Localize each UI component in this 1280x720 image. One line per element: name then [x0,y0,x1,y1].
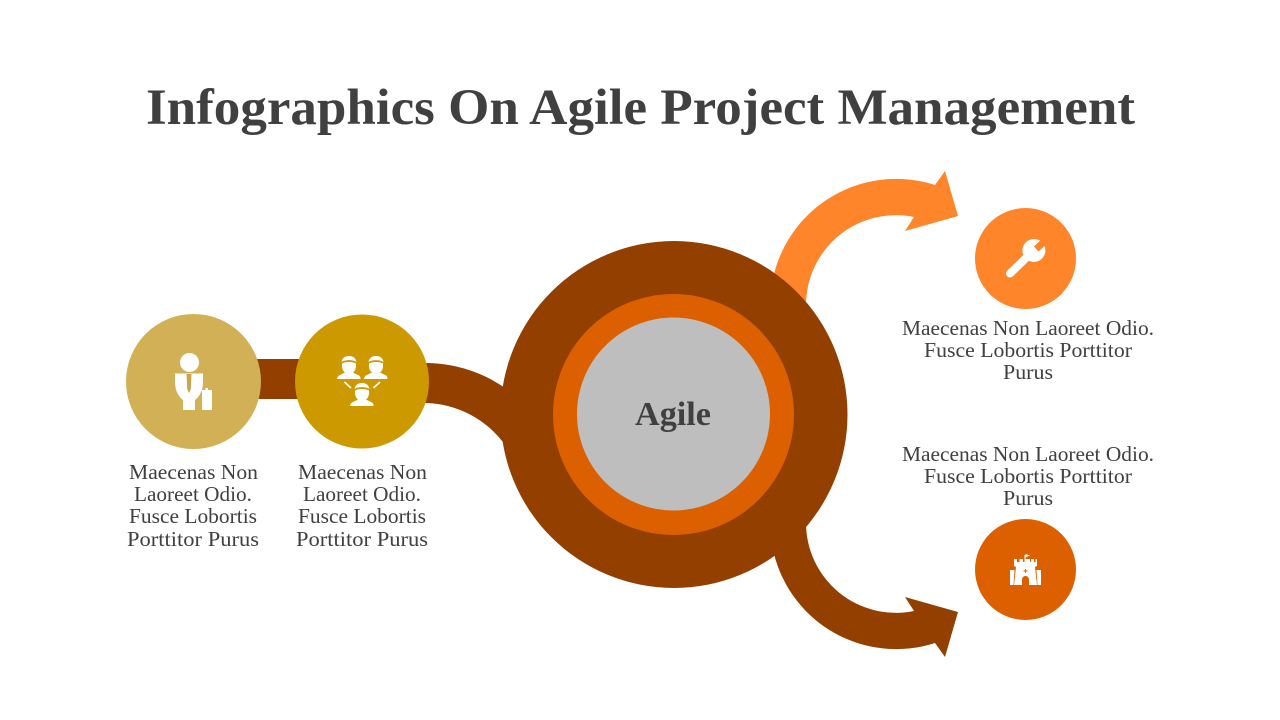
text: left column: Fusce Lobortis [129,504,257,528]
text: upper right [902,316,1154,384]
text: lower right: Purus [1003,486,1053,510]
text: second column [296,460,428,551]
text: lower right [902,442,1154,510]
text: upper right: Purus [1003,360,1053,384]
text: left column: Laoreet Odio. [134,482,252,506]
icon: castle [1010,554,1041,585]
text: left column: Porttitor Purus [127,527,259,551]
icon: wrench [1010,239,1045,274]
panel: team [295,314,429,448]
connector: left bar [250,359,310,399]
text: second column: Fusce Lobortis [298,504,426,528]
icon: team of three [337,356,388,406]
text: second column: Porttitor Purus [296,527,428,551]
panel: castle [975,519,1076,620]
text: second column: Maecenas Non [298,460,428,484]
arrow: orange up to wrench [772,171,958,320]
text: upper right: Maecenas Non Laoreet Odio. [902,316,1154,340]
icon: businessman with briefcase [175,353,212,410]
connector: curved band into hub [425,363,520,462]
text: left column [127,460,259,551]
text: lower right: Maecenas Non Laoreet Odio. [902,442,1154,466]
hub label: Agile [635,396,711,433]
text: lower right: Fusce Lobortis Porttitor [924,464,1132,488]
hub: concentric circles [500,241,848,588]
panel: wrench [975,208,1076,309]
panel: businessman [126,314,261,449]
arrow: brown down to castle [772,508,958,657]
text: second column: Laoreet Odio. [303,482,421,506]
title: Infographics On Agile Project Management [146,79,1135,135]
text: upper right: Fusce Lobortis Porttitor [924,338,1132,362]
text: left column: Maecenas Non [129,460,259,484]
